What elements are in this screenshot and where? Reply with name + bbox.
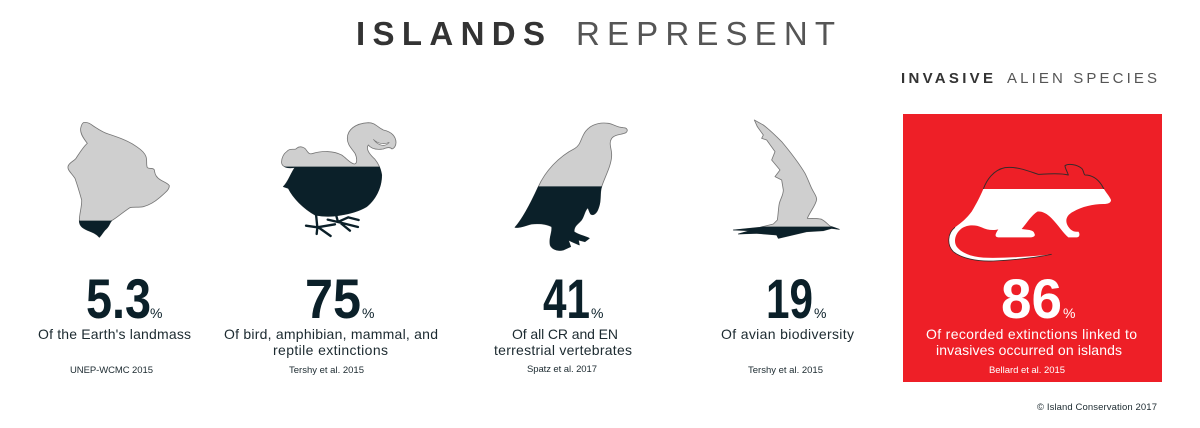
heading: invasive alien species: INVASIVE xyxy=(901,70,993,87)
description xyxy=(224,326,438,358)
description: Of bird, amphibian, mammal, and xyxy=(224,326,438,342)
icon: rat xyxy=(949,164,1111,261)
stat: 19%: % xyxy=(814,305,826,321)
description xyxy=(926,326,1137,358)
title: ISLANDS xyxy=(356,15,545,52)
stat: 75%: % xyxy=(362,305,374,321)
source: Tershy et al. 2015 xyxy=(289,365,364,376)
stat: 5.3%: % xyxy=(150,305,162,321)
heading: invasive alien species xyxy=(901,70,1157,87)
description: reptile extinctions xyxy=(273,342,388,358)
stat: 5.3%: 5.3 xyxy=(86,267,151,330)
description: Of the Earth's landmass xyxy=(38,326,191,342)
panel: vertebrates xyxy=(494,123,632,375)
title xyxy=(356,15,835,52)
stat: 75%: 75 xyxy=(305,267,361,330)
title: REPRESENT xyxy=(576,15,835,52)
red background xyxy=(903,114,1162,382)
panel: landmass xyxy=(38,122,191,376)
icon: island xyxy=(68,122,169,237)
description xyxy=(494,326,632,358)
panel: avian biodiversity xyxy=(721,120,854,376)
source: Spatz et al. 2017 xyxy=(527,364,597,375)
icon: dodo xyxy=(282,123,396,236)
description: Of recorded extinctions linked to xyxy=(926,326,1137,342)
stat: 19%: 19 xyxy=(766,267,813,330)
copyright: © Island Conservation 2017 xyxy=(1037,402,1157,413)
source: UNEP-WCMC 2015 xyxy=(70,365,153,376)
source: Tershy et al. 2015 xyxy=(748,365,823,376)
panel: invasive species xyxy=(903,114,1162,382)
icon: tern xyxy=(733,120,839,238)
icon: seabird xyxy=(515,123,627,250)
panel: extinctions xyxy=(224,123,438,376)
stat: 86%: 86 xyxy=(1001,267,1062,330)
description: terrestrial vertebrates xyxy=(494,342,632,358)
source: Bellard et al. 2015 xyxy=(989,365,1065,376)
stat: 86%: % xyxy=(1063,305,1075,321)
description: Of avian biodiversity xyxy=(721,326,854,342)
stat: 41%: % xyxy=(591,305,603,321)
stat: 41%: 41 xyxy=(543,267,590,330)
description: Of all CR and EN xyxy=(512,326,618,342)
description: invasives occurred on islands xyxy=(936,342,1122,358)
heading: invasive alien species: ALIEN SPECIES xyxy=(1007,70,1157,87)
